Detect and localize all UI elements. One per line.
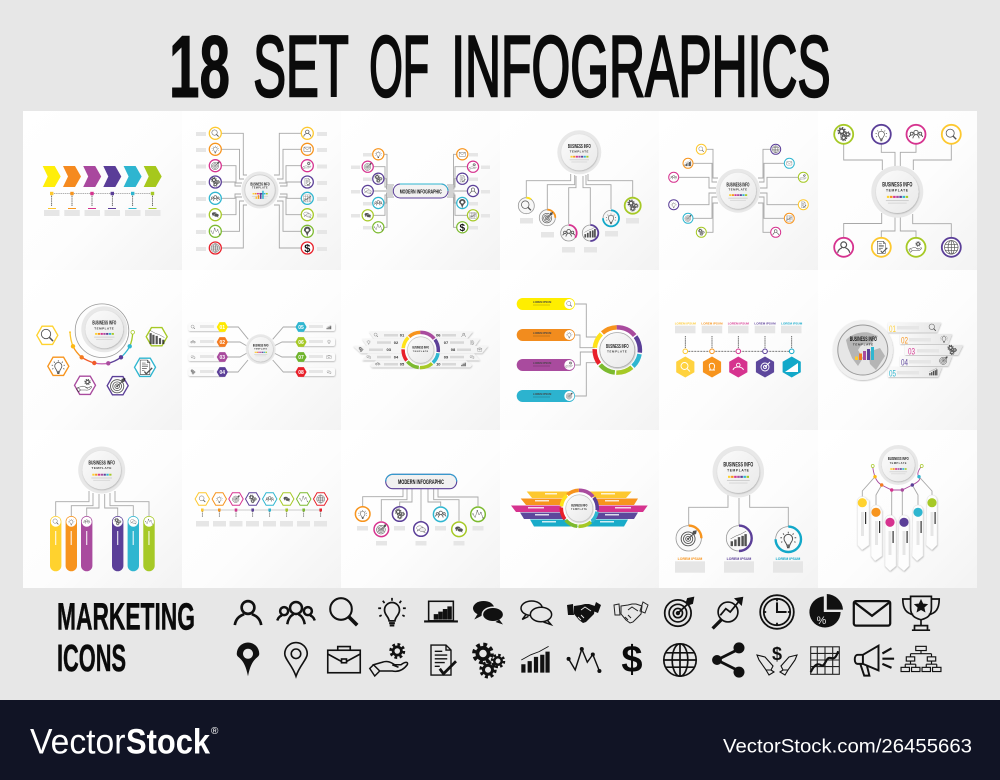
tag contents xyxy=(858,498,937,555)
labels xyxy=(520,218,639,252)
left bars xyxy=(188,323,224,376)
footer bar: ® xyxy=(211,726,219,737)
connector lines xyxy=(862,477,932,518)
panel: six progress nodes tree xyxy=(500,111,659,270)
nodes xyxy=(834,125,961,257)
bar contents xyxy=(528,493,631,522)
panel: five solid hexagons timeline xyxy=(659,270,818,430)
labels: LOREM IPSUM xyxy=(776,557,800,561)
colour pills: LOREM IPSUM xyxy=(533,392,551,396)
centre pill xyxy=(393,184,448,198)
chevron arrows xyxy=(43,166,162,187)
heading: marketing icons: MARKETING xyxy=(57,596,195,638)
connector lines xyxy=(679,149,798,232)
header pill: MODERN INFOGRAPHIC xyxy=(398,479,444,486)
timeline xyxy=(201,508,322,517)
panel: ring with ten arrow bars xyxy=(341,270,500,430)
title: SET xyxy=(253,19,349,115)
step contents: 02 xyxy=(901,336,908,346)
connector lines xyxy=(374,154,468,227)
panel: six vertical pills xyxy=(23,430,182,588)
panel: chevron timeline xyxy=(23,111,182,270)
centre disc: TEMPLATE xyxy=(252,187,268,190)
ring and disc: TEMPLATE xyxy=(413,350,429,353)
title: 18 xyxy=(169,17,230,116)
panel: three progress circles xyxy=(659,430,818,588)
centre disc: BUSINESS INFO xyxy=(888,456,909,462)
right bars xyxy=(299,323,335,376)
title xyxy=(169,17,831,116)
globe disc xyxy=(833,320,893,380)
connector lines xyxy=(56,491,149,516)
left nodes xyxy=(209,127,221,254)
dotted arc xyxy=(69,330,134,365)
title: OF xyxy=(369,19,429,115)
centre disc: TEMPLATE xyxy=(254,347,268,350)
labels xyxy=(675,322,803,333)
step contents: 05 xyxy=(889,368,896,378)
panel: eight number bars xyxy=(182,270,341,430)
centre disc: TEMPLATE xyxy=(890,461,907,465)
colour pills: LOREM IPSUM xyxy=(533,300,551,304)
numbers xyxy=(386,332,456,366)
labels: LOREM IPSUM xyxy=(675,322,696,326)
numbers: 08 xyxy=(451,347,456,352)
centre disc with ring: TEMPLATE xyxy=(94,326,114,330)
footer bar xyxy=(0,700,1000,780)
centre disc xyxy=(78,446,125,494)
centre disc with ring: BUSINESS INFO xyxy=(92,321,117,327)
step contents: 03 xyxy=(908,346,915,356)
labels xyxy=(675,557,803,573)
number hexagons: 04 xyxy=(220,370,225,376)
centre disc: TEMPLATE xyxy=(728,188,748,192)
panel: hexagons around disc xyxy=(23,270,182,430)
colour pills: LOREM IPSUM xyxy=(533,331,551,335)
numbers: 04 xyxy=(394,354,399,359)
connector lines xyxy=(575,304,600,396)
number hexagons: 06 xyxy=(298,340,304,346)
panel: twelve node map xyxy=(659,111,818,270)
centre disc xyxy=(242,172,278,208)
numbers: 03 xyxy=(386,347,392,352)
right nodes xyxy=(301,127,313,255)
globe disc: TEMPLATE xyxy=(853,342,874,346)
labels: LOREM IPSUM xyxy=(728,322,749,326)
numbers: 09 xyxy=(444,354,449,359)
centre disc: BUSINESS INFO xyxy=(253,343,269,347)
numbers: 06 xyxy=(436,332,441,338)
panel: sixteen node mind map xyxy=(182,111,341,270)
number hexagons: 01 xyxy=(220,325,225,331)
nodes xyxy=(355,507,485,537)
icon row two: $ xyxy=(772,644,782,664)
arrow bars xyxy=(353,332,488,368)
colour pills: LOREM IPSUM xyxy=(533,361,551,365)
connector lines xyxy=(222,133,301,248)
panel: four colour pills and ring xyxy=(500,270,659,430)
connector lines xyxy=(226,327,297,372)
ring and disc: BUSINESS INFO xyxy=(606,344,629,350)
nodes: $ xyxy=(460,223,466,234)
heading: marketing icons: ICONS xyxy=(57,638,126,680)
numbers: 01 xyxy=(400,332,405,338)
step contents xyxy=(889,324,957,378)
solid hexagons xyxy=(676,356,801,378)
number hexagons: 02 xyxy=(220,340,225,346)
centre disc: BUSINESS INFO xyxy=(568,144,591,150)
connector lines xyxy=(363,489,478,521)
side labels xyxy=(351,153,490,230)
nodes xyxy=(362,149,479,234)
ring and disc: BUSINESS INFO xyxy=(412,344,429,349)
panel: modern infographic tree xyxy=(341,430,500,588)
panel: eight large nodes map xyxy=(818,111,977,270)
bar text lines xyxy=(369,334,471,366)
timeline xyxy=(683,336,794,354)
centre disc: TEMPLATE xyxy=(727,469,750,473)
labels xyxy=(196,521,327,526)
connector lines xyxy=(689,495,788,526)
icon row two: $ xyxy=(621,639,643,681)
centre disc xyxy=(713,446,764,497)
labels: LOREM IPSUM xyxy=(678,557,702,561)
bar contents xyxy=(190,325,331,374)
number hexagons: 08 xyxy=(298,370,304,376)
centre disc: BUSINESS INFO xyxy=(250,182,270,187)
ring and disc: TEMPLATE xyxy=(607,349,627,353)
step bars xyxy=(888,322,963,377)
ring and disc: BUSINESS INFO xyxy=(571,502,587,507)
globe disc: BUSINESS INFO xyxy=(850,337,877,343)
number hexagons: 03 xyxy=(220,355,225,361)
footer bar: Stock xyxy=(126,722,210,762)
progress nodes xyxy=(518,198,641,241)
centre disc: TEMPLATE xyxy=(570,149,589,153)
centre disc with ring xyxy=(75,304,129,358)
timeline with labels xyxy=(44,192,160,216)
ring and disc xyxy=(403,332,438,368)
panel: globe and five steps xyxy=(818,270,977,430)
side labels xyxy=(196,132,327,251)
ring and disc xyxy=(595,327,640,373)
icon row two xyxy=(237,639,941,681)
right nodes: $ xyxy=(304,243,310,255)
centre disc: BUSINESS INFO xyxy=(727,182,749,188)
numbers: 02 xyxy=(394,340,399,345)
centre disc: BUSINESS INFO xyxy=(89,460,115,466)
ring and disc xyxy=(561,490,597,526)
hexagons xyxy=(195,493,328,505)
step contents: 04 xyxy=(901,358,908,368)
heading: marketing icons xyxy=(57,596,195,680)
number hexagons: 05 xyxy=(298,325,304,331)
colour pills xyxy=(517,298,575,402)
centre disc xyxy=(557,130,601,174)
labels: LOREM IPSUM xyxy=(781,322,803,326)
centre disc: BUSINESS INFO xyxy=(882,181,912,188)
wing bars xyxy=(511,492,648,526)
ring and disc: TEMPLATE xyxy=(571,508,587,511)
centre pill: MODERN INFOGRAPHIC xyxy=(400,189,442,195)
panel: modern infographic mind map xyxy=(341,111,500,270)
centre disc xyxy=(716,169,760,213)
numbers: 07 xyxy=(444,340,449,345)
step contents: 01 xyxy=(889,324,896,334)
progress circles xyxy=(676,526,801,552)
footer bar: Vector xyxy=(30,722,126,762)
numbers: 05 xyxy=(400,362,405,366)
nodes xyxy=(669,144,808,237)
header pill xyxy=(386,474,457,489)
hexagon icons xyxy=(37,326,167,395)
connector lines xyxy=(844,144,951,237)
labels: LOREM IPSUM xyxy=(701,322,723,326)
centre disc: BUSINESS INFO xyxy=(723,462,753,469)
number hexagons xyxy=(217,322,307,377)
footer bar: VectorStock.com/26455663 xyxy=(723,737,972,758)
vertical pills xyxy=(50,516,155,571)
centre disc: TEMPLATE xyxy=(886,189,909,193)
hanging tags xyxy=(858,495,937,571)
dotted arc xyxy=(871,464,923,492)
number hexagons: 07 xyxy=(298,355,304,361)
connector lines xyxy=(526,174,633,224)
centre disc xyxy=(871,166,923,218)
numbers: 10 xyxy=(436,362,441,366)
centre disc xyxy=(878,445,918,485)
panel: eight hexagon timeline xyxy=(182,430,341,588)
labels: LOREM IPSUM xyxy=(754,322,776,326)
bar icons xyxy=(359,333,482,366)
icon row one xyxy=(235,594,939,630)
centre disc xyxy=(246,334,276,364)
panel: colour wing bars with ring xyxy=(500,430,659,588)
centre disc: TEMPLATE xyxy=(91,466,112,470)
labels: LOREM IPSUM xyxy=(727,557,751,561)
labels xyxy=(357,526,484,546)
panel: six hanging tags xyxy=(818,430,977,588)
